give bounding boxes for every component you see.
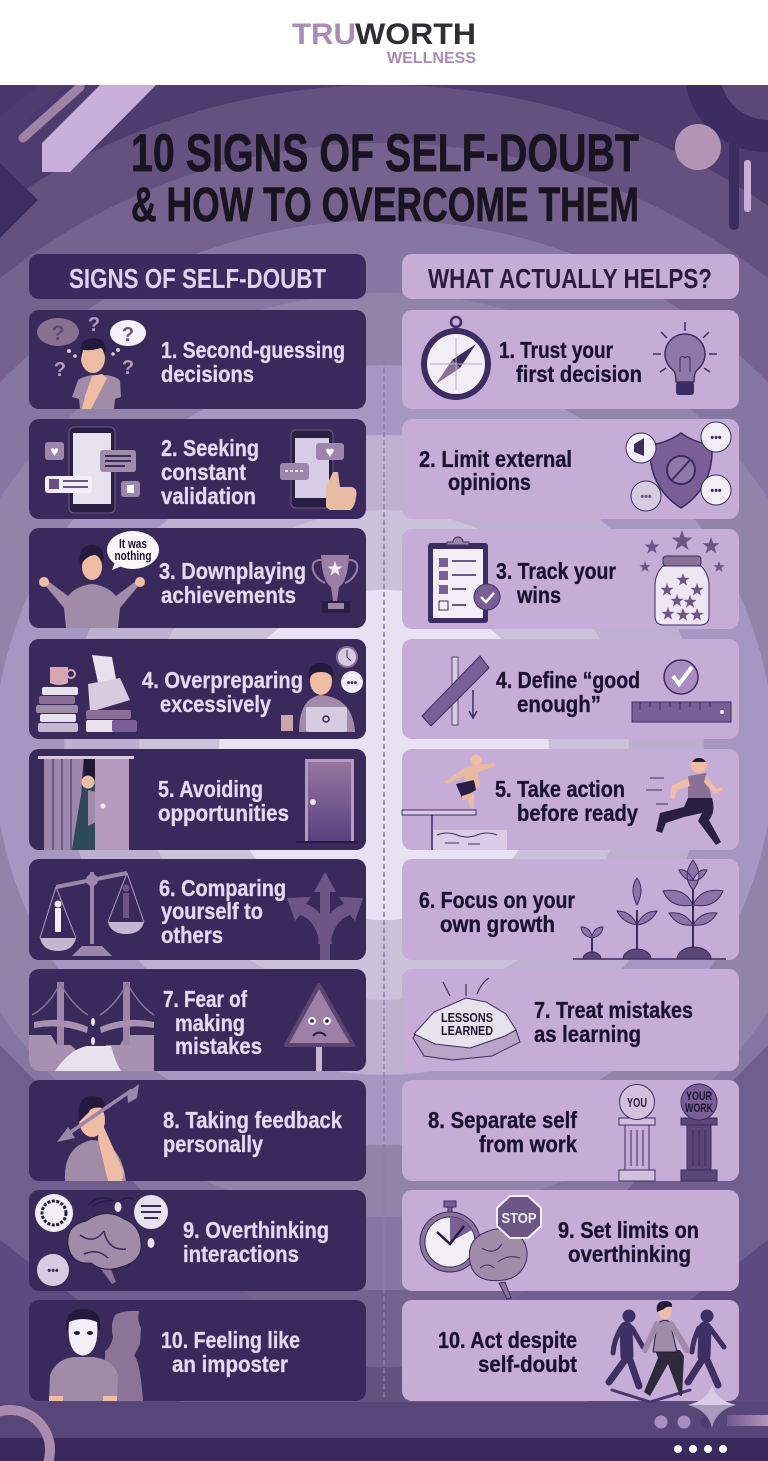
icon: diver on board [402,754,507,850]
text: achievements [161,582,296,608]
panel: sign 1 [29,310,366,409]
text: 5. Take action [495,776,625,802]
logo [292,18,476,67]
panel: sign 8 [29,1080,366,1181]
panel: help 7 [402,969,739,1071]
text: opinions [448,469,531,495]
panel: sign 5 [29,749,366,850]
icon: shield with bubbles: ••• [640,491,652,503]
panel: sign 6 [29,859,366,960]
text: validation [161,483,256,509]
text [496,558,616,608]
text: 8. Separate self [428,1107,577,1133]
text: mistakes [175,1033,262,1059]
text: 3. Track your [496,558,616,584]
text: 6. Comparing [159,875,286,901]
text [158,776,289,826]
icon: pillar you: YOU [627,1095,647,1110]
icon: light bulb [653,322,717,395]
icon: stopwatch, brain and stop sign: STOP [502,1210,536,1227]
text: making [175,1010,245,1036]
centre dashed divider [383,360,385,1400]
icon: brain with thought bubbles [35,1194,168,1286]
text: yourself to [161,898,263,924]
icon: growing plants [573,860,726,959]
panel: help 4 [402,639,739,739]
column header: what actually helps [402,254,739,299]
icon: pillar you [619,1084,655,1181]
text: 7. Fear of [163,986,247,1012]
text: as learning [534,1021,641,1047]
logo: WORTH [355,18,476,51]
icon: phones and social bubbles: ♥ [326,444,335,461]
panel: help 9 [402,1190,739,1299]
text: 5. Avoiding [158,776,263,802]
panel: sign 7 [29,969,366,1071]
icon: closed door [296,759,358,843]
icon: person hiding behind curtain [38,756,134,850]
icon: person with question clouds: ? [52,322,64,345]
text [419,887,575,937]
text [163,986,262,1059]
icon: person with question clouds: ? [122,324,134,346]
text: 7. Treat mistakes [534,997,693,1023]
icon: person with mask and shadow [49,1309,143,1401]
icon: person with question clouds: ? [54,359,66,381]
text: 3. Downplaying [159,558,306,584]
text: decisions [161,361,254,387]
panel: help 2 [402,419,739,519]
text: others [161,922,223,948]
icon: lessons learned rock [413,978,520,1060]
text [161,1327,300,1377]
text [496,667,640,717]
text: wins [516,582,561,608]
panel: help 10 [402,1300,739,1402]
text: 2. Limit external [419,446,572,472]
text [161,435,259,509]
icon: person with question clouds [37,314,146,409]
text [142,667,303,717]
icon: shield with bubbles [626,422,731,511]
text: 4. Define “good [496,667,640,693]
icon: phones and social bubbles [45,427,356,513]
text: interactions [183,1241,299,1267]
icon: phones and social bubbles: ♥ [50,443,59,459]
text: self-doubt [478,1351,577,1377]
title [131,124,639,232]
header background [0,0,768,85]
icon: lessons learned rock: LESSONS [441,1010,493,1025]
text: 9. Overthinking [183,1217,329,1243]
text [159,875,286,948]
panel: sign 9 [29,1190,366,1291]
icon: shield with bubbles: ••• [710,432,722,444]
icon: pillar your work [681,1084,717,1181]
text [499,337,642,387]
text [495,776,638,826]
panel: sign 10 [29,1300,366,1401]
panel: help 1 [402,310,739,409]
text [558,1217,699,1267]
text [159,558,306,608]
icon: person with question clouds: ? [122,357,134,379]
decorative shapes top left [0,85,156,238]
text: 8. Taking feedback [163,1107,342,1133]
text: 2. Seeking [161,435,259,461]
icon: shrugging person and bubble: It was [119,536,147,551]
icon: books and papers [36,655,137,732]
text: before ready [517,800,638,826]
column header: signs of self-doubt [29,254,366,299]
icon: person with question clouds: ? [88,314,100,336]
text [183,1217,329,1267]
icon: shrugging person and bubble: nothing [114,548,152,563]
panel: sign 4 [29,639,366,739]
text: enough” [517,691,601,717]
icon: check badge and ruler [632,660,731,722]
panel: help 6 [402,859,739,960]
icon: shrugging person and bubble [39,531,357,628]
logo: TRU [292,18,356,51]
icon: diverging arrows [287,872,363,960]
icon: running person [646,757,723,845]
text: 1. Second-guessing [161,337,345,363]
icon: balance scales [40,872,144,956]
text: excessively [160,691,271,717]
text: an imposter [172,1351,288,1377]
icon: compass [421,317,491,400]
text: 1. Trust your [499,337,613,363]
text [438,1327,577,1377]
icon: lessons learned rock: LEARNED [441,1023,493,1038]
icon: person hit by arrow [57,1084,139,1181]
text: first decision [516,361,642,387]
panel: help 5 [402,749,739,850]
icon: person at laptop [281,647,363,732]
text: 9. Set limits on [558,1217,699,1243]
icon: pillar your work: WORK [685,1101,713,1115]
panel: sign 3 [29,528,366,628]
logo: WELLNESS [387,50,476,67]
icon: ruler and arrow [422,656,489,726]
decorative shapes top right [675,0,768,230]
icon: shield with bubbles: ••• [710,485,722,497]
icon: brain with thought bubbles: ••• [47,1265,59,1277]
icon: walking figures [609,1301,724,1402]
text [163,1107,342,1157]
text: 4. Overpreparing [142,667,303,693]
bottom decorations [0,1385,768,1461]
icon: stopwatch, brain and stop sign [420,1196,541,1299]
text: 10. Feeling like [161,1327,300,1353]
icon: person at laptop: ••• [347,678,358,689]
text: from work [479,1131,577,1157]
text [161,337,345,387]
text: 6. Focus on your [419,887,575,913]
icon: clipboard checklist [428,537,500,623]
panel: help 8 [402,1080,739,1181]
text: opportunities [158,800,289,826]
icon: jar of stars [639,530,725,625]
text: personally [163,1131,263,1157]
text [534,997,693,1047]
panel: help 3 [402,529,739,629]
text: overthinking [568,1241,691,1267]
icon: sad warning sign [286,985,353,1071]
panel: sign 2 [29,419,366,519]
column header: signs of self-doubt: SIGNS OF SELF-DOUBT [69,263,326,294]
text [428,1107,577,1157]
icon: broken bridge [29,982,154,1071]
text [419,446,572,495]
text: constant [161,459,246,485]
icon: pillar your work: YOUR [686,1089,712,1103]
text: 10. Act despite [438,1327,577,1353]
text: own growth [440,911,555,937]
